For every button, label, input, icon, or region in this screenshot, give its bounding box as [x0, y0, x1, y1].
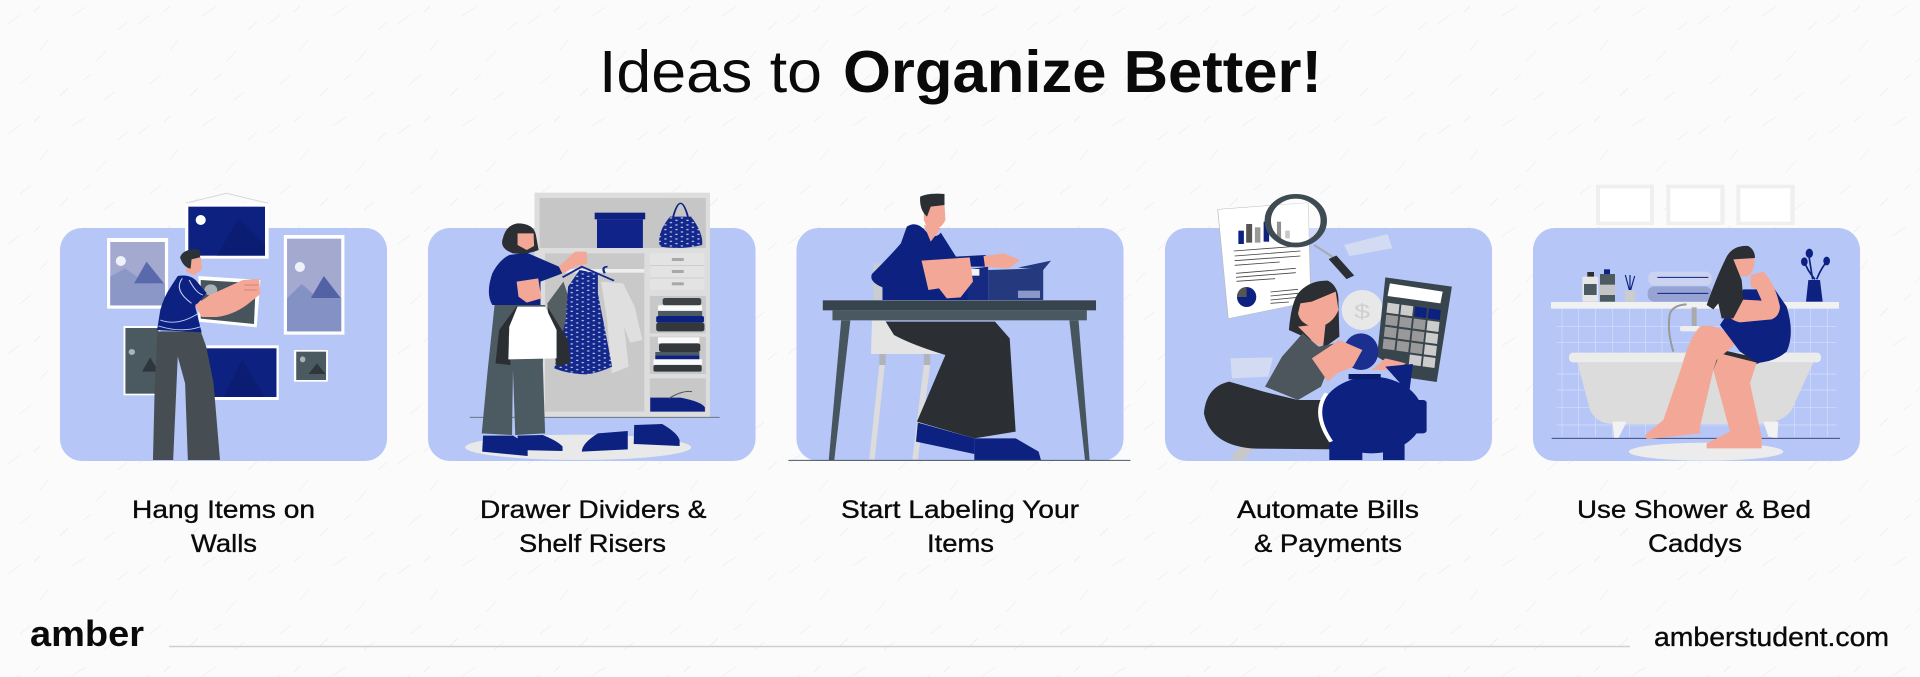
label: Items [927, 530, 994, 558]
label [132, 496, 315, 558]
website url: amberstudent.com [1654, 622, 1889, 652]
illustration: man hanging pictures [107, 193, 344, 460]
illustration: woman at wardrobe [465, 193, 720, 460]
title: Ideas to [599, 39, 822, 105]
panel background [1165, 228, 1492, 461]
label: Caddys [1648, 530, 1742, 558]
label: Automate Bills [1237, 496, 1419, 524]
panel background [60, 228, 387, 461]
panel: hang items on walls [60, 193, 387, 558]
illustration: woman with piggy bank and calculator: $ [1354, 300, 1370, 323]
label [1237, 496, 1419, 558]
panel: use shower and bed caddys [1533, 185, 1860, 558]
label: Drawer Dividers & [480, 496, 707, 524]
title: Organize Better! [843, 39, 1322, 105]
label: Hang Items on [132, 496, 315, 524]
logo: amber: amber [30, 613, 144, 654]
illustration: man labeling a box at desk [788, 194, 1130, 460]
panel background [428, 228, 756, 461]
label [480, 496, 707, 558]
label: Walls [191, 530, 257, 558]
footer rule [169, 646, 1630, 648]
illustration: woman sitting on bathtub [1551, 185, 1840, 461]
label: & Payments [1254, 530, 1402, 558]
title [599, 39, 1322, 105]
label: Use Shower & Bed [1577, 496, 1811, 524]
label [841, 496, 1079, 558]
panel background [1533, 228, 1860, 461]
panel: automate bills and payments [1165, 196, 1492, 558]
panel: start labeling your items [788, 194, 1130, 558]
label [1577, 496, 1811, 558]
label: Start Labeling Your [841, 496, 1079, 524]
panel: drawer dividers and shelf risers [428, 193, 756, 558]
label: Shelf Risers [519, 530, 666, 558]
panel background [796, 228, 1124, 461]
illustration: woman with piggy bank and calculator [1204, 196, 1452, 460]
